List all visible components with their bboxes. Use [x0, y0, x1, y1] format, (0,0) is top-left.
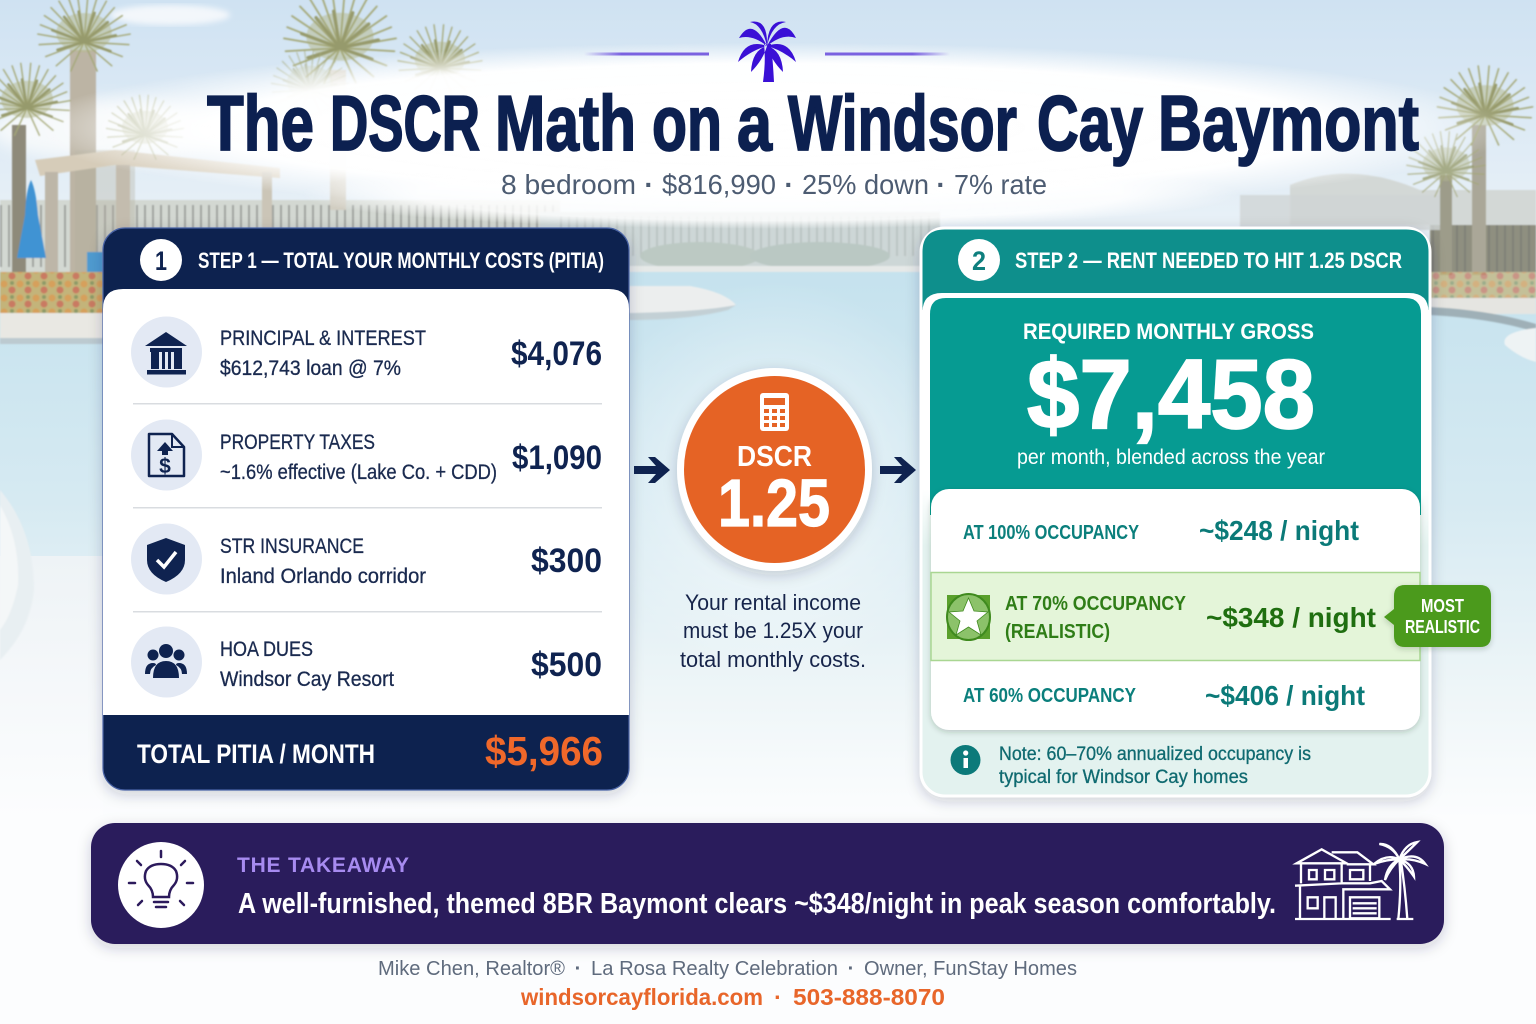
- icon: house and palm: [1295, 842, 1425, 919]
- dscr explanation: [680, 590, 866, 672]
- footer: credits: [378, 958, 1077, 980]
- row: principal and interest: $612,743 loan @ 7%: [220, 357, 401, 380]
- required monthly gross card: $7,458: [1027, 339, 1315, 449]
- panel: step 2 rent needed: [921, 228, 1491, 796]
- step 2 header: 2: [972, 246, 986, 276]
- takeaway bar: A well-furnished, themed 8BR Baymont clears ~$348/night in peak season comfortably.: [238, 888, 1276, 920]
- row: hoa dues: $500: [531, 646, 602, 684]
- total pitia footer: TOTAL PITIA / MONTH: [137, 739, 375, 769]
- dscr badge: [677, 368, 872, 571]
- arrow: costs into dscr: [634, 457, 670, 483]
- row: str insurance: $300: [531, 542, 602, 580]
- note: typical for Windsor Cay homes: [999, 767, 1248, 788]
- required monthly gross card: [930, 298, 1421, 515]
- row: str insurance: [131, 524, 602, 594]
- title: on: [652, 79, 722, 167]
- title: Math: [495, 79, 636, 167]
- footer: contact: ·: [774, 984, 782, 1010]
- total pitia footer: $5,966: [485, 728, 603, 774]
- icon: calculator: [760, 393, 789, 431]
- scene left: [0, 200, 560, 272]
- step 1 header: STEP 1 — TOTAL YOUR MONTHLY COSTS (PITIA): [198, 248, 604, 273]
- row: property taxes: [131, 420, 602, 490]
- title: a: [737, 79, 772, 167]
- logo: palm tree with flanking rules: [584, 22, 950, 82]
- title: Cay: [1037, 79, 1143, 167]
- title: Baymont: [1158, 79, 1419, 167]
- row: 70 percent occupancy highlighted: AT 70% OCCUPANCY: [1005, 593, 1187, 615]
- row: 70 percent occupancy highlighted: ~$348 / night: [1206, 602, 1376, 633]
- row: 60 percent occupancy: [963, 680, 1365, 711]
- row: 100 percent occupancy: ~$248 / night: [1199, 515, 1359, 546]
- step 1 header: 1: [155, 246, 167, 276]
- step 2 header: [922, 230, 1428, 400]
- footer: credits: Mike Chen, Realtor®: [378, 958, 565, 980]
- row: hoa dues: [131, 626, 602, 698]
- footer: credits: La Rosa Realty Celebration: [591, 958, 838, 980]
- icon: lightbulb: [118, 842, 204, 928]
- dscr explanation: total monthly costs.: [680, 647, 866, 672]
- dscr explanation: Your rental income: [685, 590, 861, 615]
- subtitle: ·: [644, 169, 654, 200]
- note: [950, 744, 1311, 788]
- row: property taxes: $1,090: [512, 439, 602, 477]
- row: 60 percent occupancy: AT 60% OCCUPANCY: [963, 685, 1137, 707]
- footer: contact: [520, 984, 945, 1010]
- most realistic badge: [1384, 585, 1491, 647]
- scene centre: [540, 212, 940, 270]
- title: The: [207, 79, 314, 167]
- takeaway bar: [91, 823, 1444, 944]
- title: [207, 79, 1419, 167]
- most realistic badge: REALISTIC: [1405, 617, 1480, 637]
- dscr badge: DSCR: [737, 441, 812, 473]
- row: 100 percent occupancy: [963, 515, 1359, 546]
- row: str insurance: Inland Orlando corridor: [220, 565, 426, 588]
- row: hoa dues: HOA DUES: [220, 638, 313, 661]
- subtitle: [501, 169, 1047, 200]
- footer: credits: ·: [848, 958, 854, 980]
- row: 70 percent occupancy highlighted: [931, 572, 1420, 660]
- row: 60 percent occupancy: ~$406 / night: [1205, 680, 1365, 711]
- subtitle: ·: [936, 169, 946, 200]
- row: property taxes: PROPERTY TAXES: [220, 431, 375, 454]
- row: 100 percent occupancy: AT 100% OCCUPANCY: [963, 522, 1140, 544]
- dscr explanation: must be 1.25X your: [683, 618, 863, 643]
- row: 70 percent occupancy highlighted: (REALISTIC): [1005, 621, 1110, 643]
- panel: step 1 monthly costs: [103, 228, 629, 790]
- takeaway bar: THE TAKEAWAY: [237, 854, 409, 877]
- title: Windsor: [788, 79, 1017, 167]
- panel body: [103, 289, 629, 715]
- row: principal and interest: $4,076: [511, 335, 602, 373]
- subtitle: ·: [784, 169, 794, 200]
- row: str insurance: STR INSURANCE: [220, 535, 364, 558]
- icon: star: [947, 594, 990, 640]
- footer: contact: windsorcayflorida.com: [520, 984, 763, 1010]
- subtitle: 8 bedroom: [501, 169, 636, 200]
- subtitle: 25% down: [802, 169, 929, 200]
- footer: credits: ·: [575, 958, 581, 980]
- occupancy table: [931, 489, 1420, 730]
- row: principal and interest: PRINCIPAL & INTEREST: [220, 327, 426, 350]
- note: Note: 60–70% annualized occupancy is: [999, 744, 1311, 765]
- dscr badge: 1.25: [718, 466, 830, 541]
- footer: credits: Owner, FunStay Homes: [864, 958, 1077, 980]
- title: DSCR: [330, 79, 480, 167]
- row: property taxes: $: [159, 455, 171, 478]
- subtitle: $816,990: [662, 169, 776, 200]
- required monthly gross card: REQUIRED MONTHLY GROSS: [1023, 319, 1314, 344]
- row: principal and interest: [131, 316, 602, 388]
- footer: contact: 503-888-8070: [793, 984, 945, 1010]
- step 2 header: STEP 2 — RENT NEEDED TO HIT 1.25 DSCR: [1015, 248, 1402, 273]
- step 1 header: [140, 239, 604, 281]
- arrow: dscr into rent needed: [880, 457, 916, 483]
- most realistic badge: MOST: [1421, 596, 1464, 616]
- scene right: [1430, 222, 1536, 272]
- subtitle: 7% rate: [954, 169, 1047, 200]
- row: property taxes: ~1.6% effective (Lake Co. + CDD): [220, 461, 497, 484]
- required monthly gross card: per month, blended across the year: [1017, 446, 1325, 469]
- total pitia footer: [137, 728, 603, 774]
- row: hoa dues: Windsor Cay Resort: [220, 668, 394, 691]
